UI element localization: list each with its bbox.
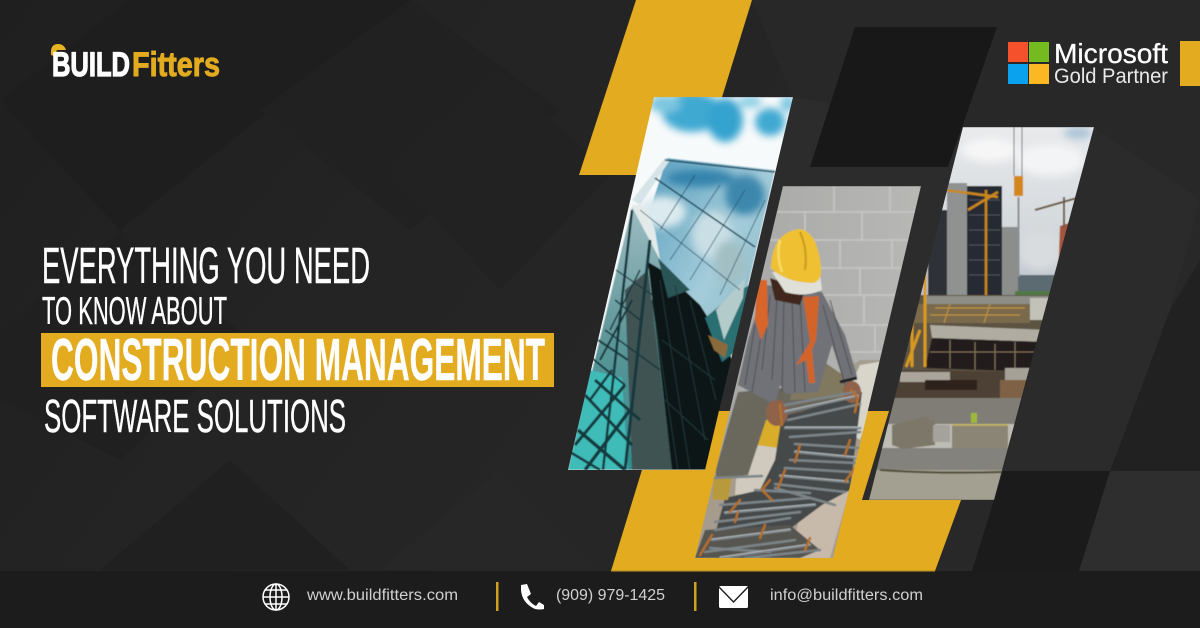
divider <box>496 582 498 611</box>
dark parallelogram top right <box>810 27 997 167</box>
photo: worker with rebar <box>690 186 925 561</box>
boot <box>712 478 732 500</box>
green worker <box>971 413 977 423</box>
yellow bin <box>757 419 781 448</box>
rebar pile <box>700 390 860 558</box>
glass mullions <box>640 160 775 295</box>
Microsoft Gold Partner badge <box>1008 38 1168 88</box>
title line 4: SOFTWARE SOLUTIONS <box>44 390 346 442</box>
highlighted banner <box>41 327 554 393</box>
gray stripe <box>625 270 672 470</box>
teal grid bottom left <box>568 370 628 470</box>
icon: globe <box>263 584 289 610</box>
left glass column <box>568 207 675 470</box>
photo: glass building <box>560 92 800 472</box>
logo: BuildFitters <box>51 44 220 84</box>
title block <box>41 237 554 442</box>
hands <box>766 400 788 426</box>
white corner column <box>632 158 670 205</box>
stacked formwork <box>892 417 935 449</box>
icon: Microsoft squares <box>1008 42 1049 84</box>
dirt ground <box>869 470 1002 500</box>
Microsoft Gold Partner badge: Gold Partner <box>1054 65 1168 88</box>
site base <box>902 294 1049 372</box>
gold tab top right <box>1180 41 1200 86</box>
tower crane <box>946 188 1000 296</box>
photo: construction site <box>860 127 1100 500</box>
neck <box>770 278 805 305</box>
logo: BuildFitters: BUILD <box>52 46 130 84</box>
dark facet right side <box>1110 260 1200 471</box>
divider <box>694 582 696 611</box>
gold parallelogram top <box>579 0 752 175</box>
dark floor under slab <box>925 338 1045 372</box>
gold shape bottom <box>611 411 961 571</box>
tree line <box>1014 290 1050 296</box>
phone text: (909) 979-1425 <box>556 587 665 604</box>
far crane <box>1035 197 1077 228</box>
concrete slab <box>930 325 1048 342</box>
retaining wall <box>882 398 1030 424</box>
icon: envelope <box>719 586 748 608</box>
website text: www.buildfitters.com <box>306 587 458 604</box>
concrete ground <box>882 423 1014 449</box>
sky with clouds <box>649 92 796 142</box>
gold footer edge <box>611 570 935 572</box>
distant buildings <box>1017 274 1054 292</box>
trousers <box>716 388 838 477</box>
highlighted banner: CONSTRUCTION MANAGEMENT <box>51 327 545 393</box>
dark reflecting facade <box>648 262 735 470</box>
ground rubble <box>696 360 880 558</box>
dark parallelogram bottom right <box>972 471 1110 571</box>
email text: info@buildfitters.com <box>770 587 923 604</box>
logo: BuildFitters: Fitters <box>132 46 220 84</box>
hanging crane hook <box>1014 127 1022 176</box>
title line 2: TO KNOW ABOUT <box>42 290 227 333</box>
icon: phone <box>521 584 544 610</box>
orange vest straps <box>755 280 768 340</box>
upper glass facade <box>652 158 776 358</box>
footer bar <box>0 570 1200 628</box>
Microsoft Gold Partner badge: Microsoft <box>1054 38 1168 69</box>
orange scaffold masts <box>906 260 925 367</box>
helmet brim <box>772 272 822 295</box>
yellow helmet <box>771 229 821 283</box>
title line 1: EVERYTHING YOU NEED <box>42 237 370 294</box>
shirt <box>738 285 857 405</box>
rebar pile shadow <box>716 392 862 529</box>
icon: hard hat <box>51 44 66 56</box>
block wall <box>690 186 925 561</box>
lower frame <box>895 370 1004 398</box>
lighter panel bottom right <box>1079 471 1200 571</box>
